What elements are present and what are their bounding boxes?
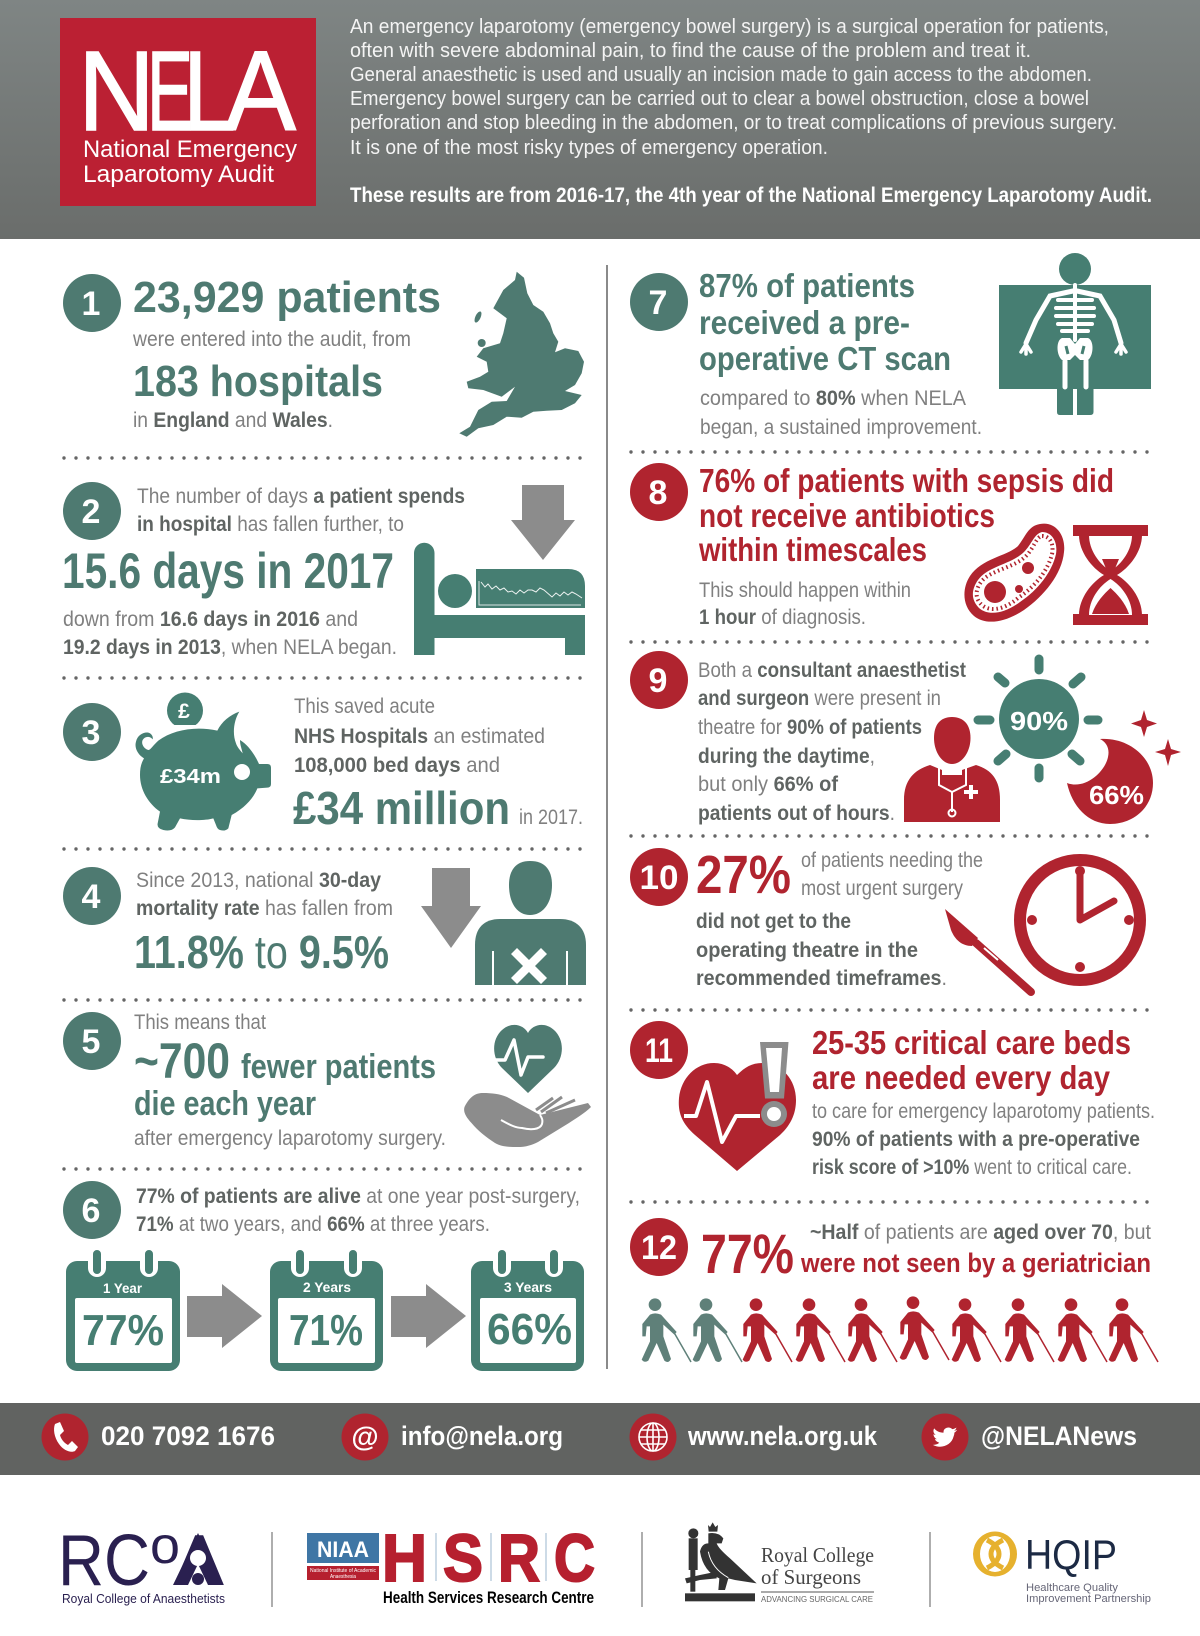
pictogram: ten walking patients (642, 1296, 1158, 1362)
text: fewer patients die (134, 1011, 446, 1150)
text: sepsis antibiotics: not receive antibiotics (699, 497, 995, 534)
text: geriatrician: were not seen by a geriatrician (800, 1248, 1151, 1278)
text: CT scan rates: compared to 80% when NELA (700, 387, 966, 410)
NELA logo: L (183, 28, 236, 154)
text: survival rates: 71% at two years, and 66% at three years. (136, 1213, 490, 1236)
text: patients and hospitals (132, 273, 441, 432)
arrow: down (421, 868, 481, 948)
logo: HQIP: HQIP (1025, 1531, 1117, 1578)
text: sepsis antibiotics: within timescales (698, 531, 927, 568)
number badge 11: 11 (645, 1032, 673, 1070)
logo: Royal College of Surgeons: ADVANCING SURGICAL CARE (761, 1595, 873, 1604)
text: urgent surgery: of patients needing the (801, 849, 983, 872)
logo: HQIP (973, 1531, 1151, 1605)
text: CT scan rates: 87% of patients (699, 267, 915, 304)
logo: NIAA HSRC: S (443, 1521, 483, 1596)
text: length of stay: 19.2 days in 2013, when NELA began. (63, 636, 397, 659)
number badge 11 (630, 1021, 688, 1079)
text: critical care beds: are needed every day (812, 1059, 1111, 1096)
text: CT scan rates: began, a sustained improvement. (700, 416, 982, 439)
icon: hospital bed with monitor (414, 543, 585, 655)
text: critical care beds: 25-35 critical care beds (812, 1024, 1131, 1061)
text: urgent surgery (696, 845, 983, 990)
text: sepsis antibiotics: This should happen within (699, 579, 911, 602)
icon: clock (1020, 860, 1140, 980)
calendar: 3 years: 66% (487, 1305, 572, 1354)
number badge 10 (630, 848, 688, 906)
contact: phone: 020 7092 1676 (101, 1421, 275, 1451)
icon: scalpel (945, 909, 1031, 992)
header band (0, 0, 1200, 239)
intro text: often with severe abdominal pain, to find the cause of the problem and treat it. (350, 40, 1031, 62)
panel: 10 urgent surgery (630, 845, 1140, 992)
text: mortality rate: Since 2013, national 30-day (136, 869, 381, 892)
contact: website: www.nela.org.uk (687, 1421, 878, 1451)
intro text: perforation and stop bleeding in the abdomen, or to treat complications of previous surgery. (350, 112, 1117, 134)
panel: 4 mortality (63, 861, 586, 985)
NELA logo: E (147, 28, 193, 154)
NELA logo (60, 18, 316, 206)
text: geriatrician (701, 1221, 1151, 1285)
number badge 9 (630, 651, 688, 709)
logo: NIAA HSRC: NIAA (317, 1537, 369, 1562)
logo: NIAA HSRC: C (554, 1521, 595, 1596)
logo: Royal College of Anaesthetists: Royal College of Anaesthetists (62, 1591, 225, 1606)
text: sepsis antibiotics: 1 hour of diagnosis. (699, 606, 866, 629)
icon: patient with cross (475, 861, 586, 985)
icon: bacterium (964, 524, 1064, 622)
text: mortality rate: 11.8% to 9.5% (134, 926, 389, 978)
logo: Royal College of Anaesthetists: A (174, 1521, 224, 1601)
text: consultant presence (698, 659, 966, 825)
intro text: General anaesthetic is used and usually an incision made to gain access to the abdomen. (350, 64, 1092, 86)
calendar: 1 year: 77% (82, 1306, 164, 1355)
icon: sun 90%: 90% (1010, 706, 1068, 736)
calendar: 3 years (471, 1254, 584, 1371)
contact bar (0, 1403, 1200, 1475)
panel: 9 consultant presence (630, 651, 1181, 825)
logo: HQIP: Healthcare Quality (1026, 1582, 1118, 1594)
number badge 7 (630, 273, 688, 331)
number badge 3 (63, 703, 121, 761)
calendar: 3 years: 3 Years (504, 1279, 552, 1295)
NELA logo: A (225, 28, 297, 154)
text: mortality rate (134, 869, 393, 978)
text: geriatrician: ~Half of patients are aged over 70, but (810, 1221, 1151, 1244)
number badge 6: 6 (82, 1192, 100, 1230)
text: saved bed days and money: 108,000 bed days and (294, 754, 500, 777)
icon: piggy bank: £34m (160, 766, 221, 788)
text: urgent surgery: 27% (696, 845, 791, 905)
text: fewer patients die: fewer patients (241, 1048, 436, 1086)
contact: twitter: @NELANews (981, 1421, 1137, 1451)
text: critical care beds: risk score of >10% went to critical care. (812, 1156, 1132, 1179)
text: consultant presence: but only 66% of (698, 773, 839, 796)
icon: x-ray skeleton (999, 253, 1151, 415)
calendar: 2 years: 2 Years (303, 1279, 351, 1295)
text: consultant presence: theatre for 90% of patients (698, 716, 922, 739)
text: CT scan rates (699, 267, 982, 439)
panel: 2 days in hospital (62, 482, 585, 659)
text: sepsis antibiotics: 76% of patients with sepsis did (699, 462, 1114, 499)
text: sepsis antibiotics (698, 462, 1114, 629)
text: length of stay: in hospital has fallen further, to (137, 513, 404, 536)
number badge 9: 9 (649, 662, 667, 700)
icon: sun 90% (978, 659, 1098, 778)
contact: email: info@nela.org (401, 1421, 563, 1451)
icon: surgeon (904, 717, 1000, 822)
number badge 12 (630, 1218, 688, 1276)
number badge 12: 12 (641, 1229, 677, 1267)
text: consultant presence: during the daytime, (698, 745, 875, 768)
text: survival rates: 77% of patients are alive at one year post-surgery, (136, 1185, 580, 1208)
logo: NIAA HSRC (307, 1521, 595, 1607)
logo: NIAA HSRC: H (382, 1521, 427, 1596)
logo: Royal College of Surgeons: Royal College (761, 1543, 874, 1567)
calendar: 2 years: 71% (289, 1306, 363, 1355)
number badge 8: 8 (649, 474, 667, 512)
number badge 5: 5 (82, 1023, 100, 1061)
text: fewer patients die: ~700 (134, 1033, 230, 1089)
text: critical care beds: 90% of patients with a pre-operative (812, 1128, 1140, 1151)
text: critical care beds (812, 1024, 1155, 1179)
text: fewer patients die: after emergency laparotomy surgery. (134, 1127, 446, 1150)
text: saved bed days and money: NHS Hospitals an estimated (294, 725, 545, 748)
logo: Royal College of Anaesthetists (58, 1517, 225, 1606)
text: saved bed days and money: £34 million (293, 782, 510, 834)
panel: 8 sepsis (630, 462, 1148, 629)
text: urgent surgery: did not get to the (696, 910, 851, 933)
text: consultant presence: and surgeon were present in (698, 687, 941, 710)
text: CT scan rates: operative CT scan (699, 340, 951, 377)
logo: Royal College of Anaesthetists: o (150, 1517, 180, 1575)
contact: phone (42, 1414, 275, 1460)
text: saved bed days and money: This saved acute (294, 695, 435, 718)
text: fewer patients die: die each year (134, 1085, 316, 1123)
icon: hourglass (1073, 525, 1148, 625)
logo: NIAA HSRC: Health Services Research Centre (383, 1588, 594, 1607)
icon: map of England and Wales (459, 272, 584, 437)
intro text: An emergency laparotomy (emergency bowel surgery) is a surgical operation for patients, (350, 16, 1109, 38)
text: fewer patients die: This means that (134, 1011, 266, 1034)
panel: 12 geriatrician (630, 1218, 1158, 1362)
number badge 6 (63, 1181, 121, 1239)
text: urgent surgery: most urgent surgery (801, 877, 963, 900)
NELA logo: N (78, 28, 155, 154)
number badge 5 (63, 1012, 121, 1070)
number badge 1: 1 (82, 285, 100, 323)
icon: piggy bank: £ (178, 700, 190, 723)
panel: 6 survival (63, 1181, 584, 1371)
intro text: Emergency bowel surgery can be carried out to clear a bowel obstruction, close a bowel (350, 88, 1089, 110)
contact: website (630, 1414, 878, 1460)
number badge 4: 4 (82, 878, 101, 916)
NELA logo: National Emergency (83, 136, 297, 163)
text: consultant presence: Both a consultant anaesthetist (698, 659, 966, 682)
panel: 11 critical care (630, 1021, 1155, 1179)
panel: 7 CT scan (630, 253, 1151, 439)
text: urgent surgery: recommended timeframes. (696, 967, 947, 990)
text: CT scan rates: received a pre- (699, 304, 910, 341)
number badge 10: 10 (640, 859, 678, 897)
text: urgent surgery: operating theatre in the (696, 939, 918, 962)
text: saved bed days and money (293, 695, 583, 834)
text: critical care beds: to care for emergency laparotomy patients. (812, 1100, 1155, 1123)
panel: 1 patients (63, 272, 584, 437)
calendar: 1 year: 1 Year (103, 1280, 143, 1296)
contact: twitter (922, 1414, 1137, 1460)
icon: moon 66%: 66% (1089, 780, 1144, 810)
icon: heart with alert (679, 1042, 796, 1171)
panel: 3 savings (63, 692, 583, 834)
icon: piggy bank (136, 692, 271, 831)
intro text: It is one of the most risky types of emergency operation. (350, 137, 828, 159)
number badge 8 (630, 463, 688, 521)
panel: 5 fewer deaths (63, 1011, 591, 1150)
number badge 1 (63, 274, 121, 332)
logo: NIAA HSRC: National Institute of Academic (310, 1568, 376, 1574)
logo: NIAA HSRC: Anaesthesia (330, 1574, 356, 1580)
text: patients and hospitals: in England and Wales. (133, 409, 333, 432)
text: patients and hospitals: were entered into the audit, from (132, 328, 411, 351)
calendar: 1 year (66, 1254, 180, 1371)
intro text (350, 16, 1117, 159)
logo: NIAA HSRC: R (498, 1521, 540, 1596)
text: length of stay: down from 16.6 days in 2016 and (63, 608, 358, 631)
text: mortality rate: mortality rate has fallen from (136, 897, 393, 920)
logo: Royal College of Surgeons (685, 1522, 874, 1604)
arrow: down (511, 485, 575, 560)
text: patients and hospitals: 23,929 patients (133, 273, 441, 322)
icon: moon 66% (1067, 710, 1181, 824)
logo: HQIP: Improvement Partnership (1026, 1593, 1151, 1605)
contact: email (342, 1414, 563, 1460)
text: length of stay (62, 485, 465, 659)
text: saved bed days and money: in 2017. (519, 806, 583, 829)
text: length of stay: 15.6 days in 2017 (62, 543, 394, 599)
number badge 2: 2 (82, 493, 100, 531)
icon: heart and hand (464, 1025, 591, 1147)
arrow: right (391, 1284, 466, 1348)
number badge 4 (63, 867, 121, 925)
calendar: 2 years (270, 1254, 383, 1371)
contact: email: @ (351, 1421, 379, 1452)
text: survival rates (136, 1185, 580, 1236)
text: geriatrician: 77% (701, 1222, 794, 1285)
text: patients and hospitals: 183 hospitals (133, 357, 383, 406)
logo: Royal College of Surgeons: of Surgeons (761, 1565, 861, 1589)
text: consultant presence: patients out of hours. (698, 802, 895, 825)
number badge 2 (63, 482, 121, 540)
arrow: right (187, 1284, 262, 1348)
number badge 3: 3 (82, 714, 100, 752)
NELA logo: Laparotomy Audit (83, 161, 274, 188)
number badge 7: 7 (649, 284, 667, 322)
logo: Royal College of Anaesthetists: RC (58, 1521, 150, 1601)
text: length of stay: The number of days a patient spends (137, 485, 465, 508)
